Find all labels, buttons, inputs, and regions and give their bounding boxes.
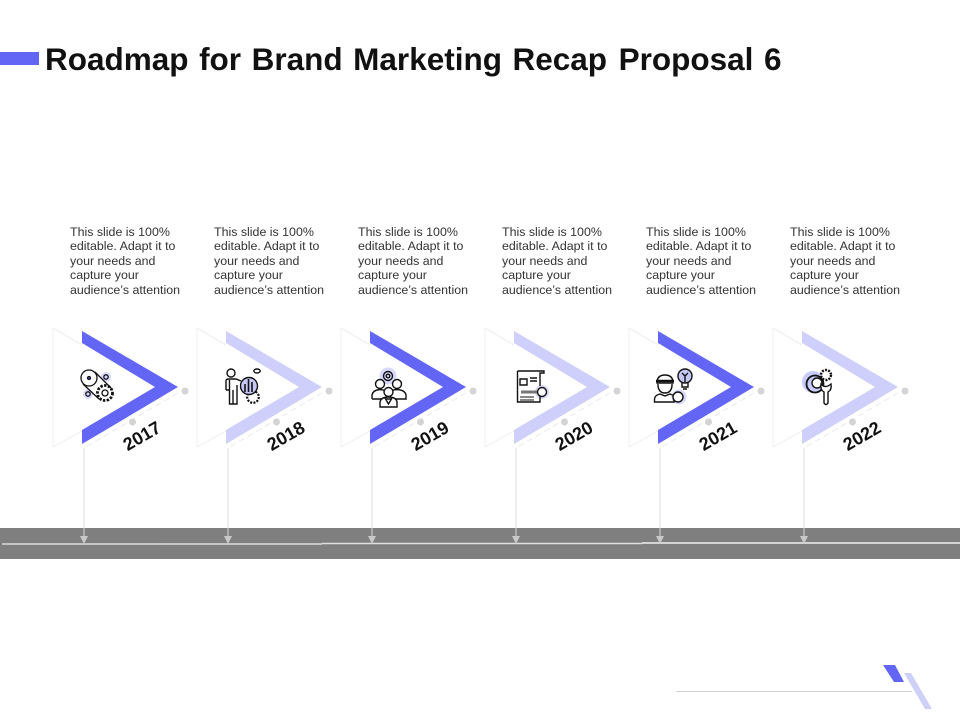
- icon: engineer and light bulb: [654, 369, 692, 404]
- text block 2017: [70, 224, 180, 296]
- text block 2020: your needs and: [502, 254, 587, 268]
- connector: [84, 393, 178, 448]
- text block 2018: [214, 224, 324, 296]
- text block 2021: editable. Adapt it to: [646, 239, 751, 253]
- text block 2021: [646, 224, 756, 296]
- chevron: [82, 331, 178, 444]
- text block 2019: [358, 224, 468, 296]
- connector: [804, 393, 898, 448]
- text block 2018: your needs and: [214, 254, 299, 268]
- footer decoration: [676, 665, 932, 709]
- text block 2020: capture your: [502, 268, 571, 282]
- icon: presenter with chart: [226, 369, 260, 404]
- text block 2021: your needs and: [646, 254, 731, 268]
- text block 2017: editable. Adapt it to: [70, 239, 175, 253]
- text block 2022: audience’s attention: [790, 282, 900, 296]
- text block 2019: This slide is 100%: [358, 224, 458, 238]
- title accent bar: [0, 52, 39, 65]
- text block 2019: editable. Adapt it to: [358, 239, 463, 253]
- year: 2017: [120, 417, 164, 455]
- title: Roadmap for Brand Marketing Recap Proposal 6: [45, 40, 781, 76]
- year: 2021: [696, 417, 740, 455]
- text block 2020: editable. Adapt it to: [502, 239, 607, 253]
- icon: report document: [518, 371, 549, 402]
- step 2019: [341, 328, 476, 544]
- text block 2017: capture your: [70, 268, 139, 282]
- text block 2019: audience’s attention: [358, 282, 468, 296]
- connector: [228, 393, 322, 448]
- text block 2021: capture your: [646, 268, 715, 282]
- step 2017: [53, 328, 188, 544]
- text block 2017: This slide is 100%: [70, 224, 170, 238]
- icon: wrench and gear: [802, 370, 831, 404]
- year: 2022: [840, 417, 884, 455]
- text block 2022: capture your: [790, 268, 859, 282]
- text block 2017: audience’s attention: [70, 282, 180, 296]
- text block 2022: editable. Adapt it to: [790, 239, 895, 253]
- text block 2019: your needs and: [358, 254, 443, 268]
- connector: [372, 393, 466, 448]
- text block 2021: audience’s attention: [646, 282, 756, 296]
- year: 2020: [552, 417, 596, 455]
- year: 2018: [264, 417, 308, 455]
- text block 2018: audience’s attention: [214, 282, 324, 296]
- chevron: [514, 331, 610, 444]
- text block 2020: [502, 224, 612, 296]
- year: 2019: [408, 417, 452, 455]
- icon: team with target: [372, 368, 406, 407]
- text block 2022: your needs and: [790, 254, 875, 268]
- text block 2018: capture your: [214, 268, 283, 282]
- text block 2018: editable. Adapt it to: [214, 239, 319, 253]
- step 2021: [629, 328, 764, 544]
- text block 2022: [790, 224, 900, 296]
- text block 2019: capture your: [358, 268, 427, 282]
- step 2022: [773, 328, 908, 544]
- timeline band: [0, 528, 960, 559]
- chevron: [802, 331, 898, 444]
- chevron: [226, 331, 322, 444]
- icon: gears and belt: [81, 370, 112, 400]
- step 2020: [485, 328, 620, 544]
- text block 2017: your needs and: [70, 254, 155, 268]
- chevron: [658, 331, 754, 444]
- text block 2022: This slide is 100%: [790, 224, 890, 238]
- text block 2020: audience’s attention: [502, 282, 612, 296]
- connector: [516, 393, 610, 448]
- text block 2018: This slide is 100%: [214, 224, 314, 238]
- text block 2020: This slide is 100%: [502, 224, 602, 238]
- chevron: [370, 331, 466, 444]
- connector: [660, 393, 754, 448]
- text block 2021: This slide is 100%: [646, 224, 746, 238]
- step 2018: [197, 328, 332, 544]
